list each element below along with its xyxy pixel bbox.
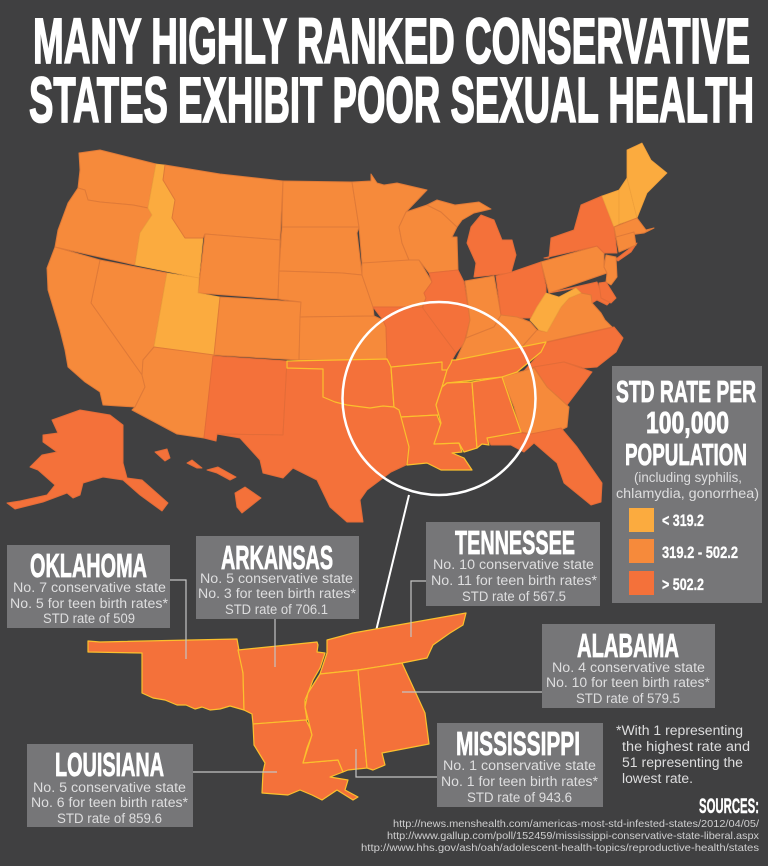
map: Hawaii bbox=[155, 449, 261, 513]
legend item: highest bbox=[629, 571, 704, 595]
detail map: six conservative states bbox=[88, 613, 466, 800]
panel: Mississippi: STD rate of 943.6 bbox=[467, 790, 572, 805]
legend item: middle: 319.2 - 502.2 bbox=[662, 543, 738, 562]
panel: Arkansas: No. 3 for teen birth rates* bbox=[198, 586, 357, 601]
footnote: 51 representing the bbox=[622, 755, 743, 770]
panel: Arkansas: No. 5 conservative state bbox=[200, 571, 353, 586]
panel: Alabama: ALABAMA bbox=[577, 627, 679, 664]
panel: Oklahoma: No. 5 for teen birth rates* bbox=[10, 596, 169, 611]
legend item: lowest bbox=[629, 508, 704, 532]
panel: Oklahoma: STD rate of 509 bbox=[43, 611, 135, 626]
panel: Tennessee: TENNESSEE bbox=[455, 524, 575, 561]
footnote: the highest rate and bbox=[622, 739, 750, 754]
panel: Alabama: STD rate of 579.5 bbox=[576, 691, 680, 706]
panel: Mississippi bbox=[356, 723, 603, 807]
legend heading bbox=[616, 374, 756, 472]
panel: Arkansas bbox=[196, 536, 359, 667]
panel: Tennessee: No. 10 conservative state bbox=[433, 557, 594, 572]
map: United States STD rates by state bbox=[47, 143, 667, 522]
sources bbox=[361, 795, 760, 854]
panel: Alabama bbox=[402, 624, 715, 708]
legend heading: 100,000 bbox=[646, 405, 729, 440]
panel: Louisiana bbox=[27, 744, 277, 827]
sources: http://www.hhs.gov/ash/oah/adolescent-health-topics/reproductive-health/states bbox=[361, 842, 759, 854]
panel: Tennessee: STD rate of 567.5 bbox=[462, 589, 566, 604]
legend item: middle bbox=[629, 539, 738, 563]
legend item: lowest: < 319.2 bbox=[662, 511, 704, 530]
legend note: (including syphilis, bbox=[634, 470, 742, 485]
footnote: lowest rate. bbox=[622, 771, 693, 786]
panel: Louisiana: STD rate of 859.6 bbox=[57, 811, 162, 826]
panel: Mississippi: No. 1 conservative state bbox=[443, 758, 596, 773]
sources: http://www.gallup.com/poll/152459/mississippi-conservative-state-liberal.aspx bbox=[387, 830, 760, 842]
panel: Oklahoma bbox=[7, 545, 186, 659]
footnote: *With 1 representing bbox=[616, 723, 743, 738]
panel: legend bbox=[612, 366, 762, 603]
panel: Oklahoma: No. 7 conservative state bbox=[13, 580, 166, 595]
sources: http://news.menshealth.com/americas-most-std-infested-states/2012/04/05/ bbox=[393, 818, 759, 830]
footnote bbox=[616, 723, 750, 786]
panel: Tennessee: No. 11 for teen birth rates* bbox=[431, 573, 598, 588]
panel: Alabama: No. 4 conservative state bbox=[552, 660, 705, 675]
callout circle with pointer to detail map bbox=[342, 302, 536, 631]
legend note bbox=[616, 470, 759, 501]
map: Alaska bbox=[7, 410, 168, 511]
panel: Mississippi: No. 1 for teen birth rates* bbox=[441, 774, 599, 789]
panel: Louisiana: LOUISIANA bbox=[55, 746, 164, 783]
panel: Tennessee bbox=[411, 522, 600, 637]
panel: Mississippi: MISSISSIPPI bbox=[456, 725, 580, 762]
panel: Oklahoma: OKLAHOMA bbox=[30, 547, 147, 584]
panel: Arkansas: ARKANSAS bbox=[221, 539, 333, 576]
panel: Louisiana: No. 5 conservative state bbox=[33, 780, 186, 795]
legend item: highest: > 502.2 bbox=[662, 575, 704, 594]
title bbox=[29, 5, 754, 136]
legend note: chlamydia, gonorrhea) bbox=[616, 486, 759, 501]
panel: Louisiana: No. 6 for teen birth rates* bbox=[31, 795, 189, 810]
panel: Arkansas: STD rate of 706.1 bbox=[225, 602, 328, 617]
panel: Alabama: No. 10 for teen birth rates* bbox=[546, 675, 711, 690]
